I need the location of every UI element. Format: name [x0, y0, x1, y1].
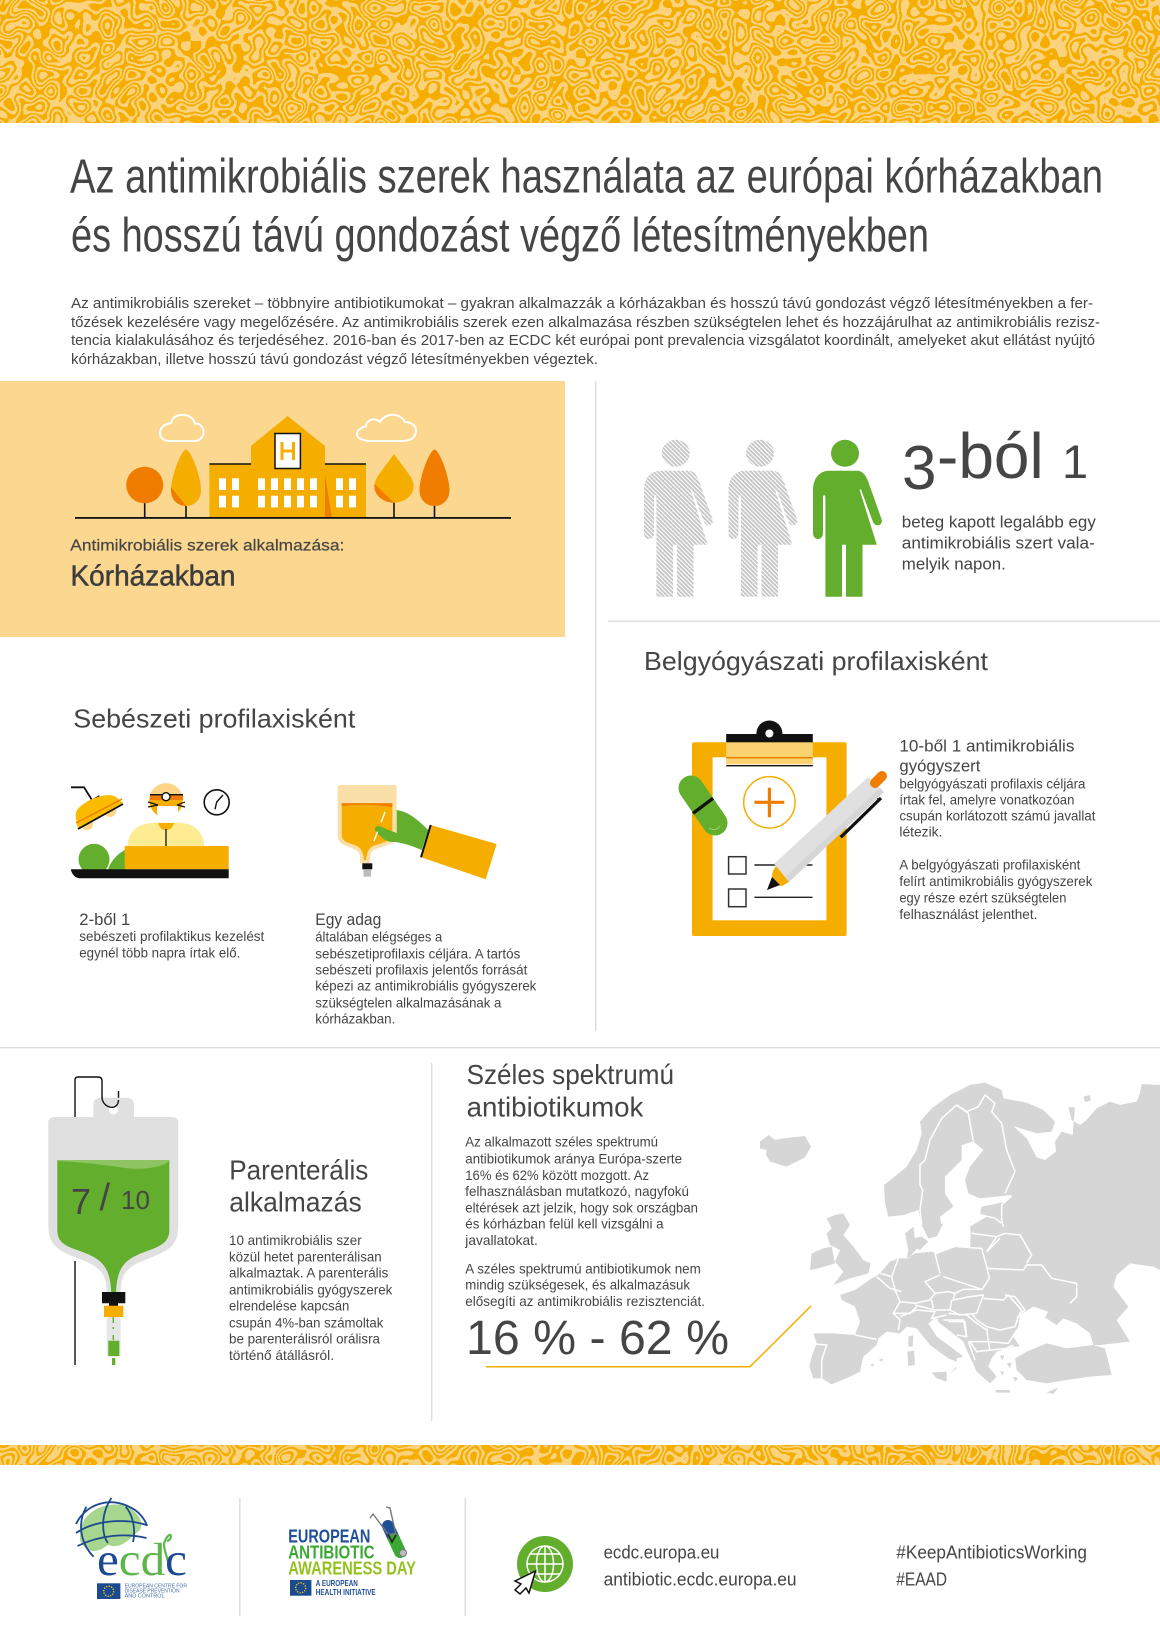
heading: Sebészeti profilaxisként	[73, 704, 356, 734]
text: one in ten: írtak fel, amelyre vonatkozóan	[899, 792, 1074, 807]
text: patient statistic: beteg kapott legalább egy	[902, 513, 1096, 532]
logo: European Antibiotic Awareness Day: AWARENESS DAY	[288, 1557, 417, 1578]
map of Europe	[760, 1083, 1160, 1394]
logo: ECDC: EUROPEAN CENTRE FOR	[125, 1584, 187, 1590]
text: hashtags: #KeepAntibioticsWorking	[896, 1542, 1087, 1562]
text: broad-spectrum details: antibiotikumok aránya Európa-szerte	[465, 1151, 682, 1166]
text: patient statistic	[902, 513, 1096, 574]
icon: hospital building	[209, 416, 366, 518]
heading: Széles spektrumú	[467, 1059, 674, 1090]
text: website links: ecdc.europa.eu	[604, 1542, 719, 1562]
panel: one in three patients	[644, 420, 1096, 597]
statistic: 7 / 10: 10	[121, 1185, 150, 1215]
text: parenteral details: antimikrobiális gyógyszerek	[229, 1282, 392, 1297]
logo: ECDC	[76, 1498, 187, 1600]
icon: trees	[126, 449, 449, 518]
text: one dose: sebészeti profilaxis jelentős forrását	[315, 962, 528, 977]
text: one dose: szükségtelen alkalmazásának a	[315, 995, 502, 1010]
text: broad-spectrum details: javallatokat.	[464, 1233, 538, 1248]
text: website links: antibiotic.ecdc.europa.eu	[604, 1570, 797, 1590]
icon: IV bag held by gloved hand	[338, 785, 497, 879]
footer	[76, 1498, 1087, 1616]
text: parenteral details: történő átállásról.	[229, 1348, 334, 1363]
text: broad-spectrum details: eltérések azt jelzik, hogy sok országban	[465, 1201, 698, 1216]
text: broad-spectrum details: 16% és 62% között mozgott. Az	[465, 1168, 649, 1183]
heading: Belgyógyászati profilaxisként	[644, 646, 989, 676]
logo: European Antibiotic Awareness Day: A EUROPEAN	[316, 1578, 358, 1588]
intro text: Az antimikrobiális szereket – többnyire antibiotikumokat – gyakran alkalmazzák a kórházakban és hosszú távú gondozást végző létesítményekben a fer-	[71, 296, 1093, 312]
text: patient statistic: melyik napon.	[902, 555, 1006, 574]
top pattern banner	[0, 0, 1160, 123]
text: hashtags: #EAAD	[896, 1570, 947, 1590]
text: broad-spectrum details: és kórházban felül kell vizsgálni a	[465, 1217, 664, 1232]
text: one in ten	[899, 737, 1096, 922]
text: website links	[604, 1542, 797, 1590]
panel: broad-spectrum antibiotics	[464, 1059, 1160, 1394]
title	[70, 151, 1103, 263]
text: two-in-one statistic	[79, 910, 265, 961]
text: one in ten: felírt antimikrobiális gyógyszerek	[899, 874, 1093, 889]
statistic: 3-ból 1: 3	[902, 434, 936, 503]
logo: European Antibiotic Awareness Day	[288, 1507, 417, 1597]
intro text: kórházakban, illetve hosszú távú gondozást végző létesítményekben végeztek.	[71, 352, 598, 368]
statistic: 3-ból 1: 1	[1062, 435, 1088, 488]
text: patient statistic: antimikrobiális szert vala-	[902, 533, 1095, 552]
text: two-in-one statistic: 2-ből 1	[79, 910, 130, 929]
icon: clipboard with pill and pen	[691, 720, 884, 936]
text: broad-spectrum details	[464, 1135, 705, 1309]
heading	[467, 1059, 674, 1123]
heading: alkalmazás	[229, 1187, 362, 1218]
text: two-in-one statistic: sebészeti profilaktikus kezelést	[79, 929, 265, 944]
icon: web globe with cursor	[515, 1536, 573, 1594]
text: parenteral details: be parenterálisról orálisra	[229, 1331, 380, 1346]
text: one in ten: A belgyógyászati profilaxisként	[899, 857, 1081, 872]
text: parenteral details	[229, 1233, 392, 1363]
intro text: tőzések kezelésére vagy megelőzésére. Az antimikrobiális szerek ezen alkalmazása részben szükségtelen lehet és hozzájárulhat az antimikrobiális rezisz-	[71, 315, 1100, 331]
icon: clouds	[160, 415, 416, 441]
statistic: 3-ból 1: -ból	[937, 420, 1062, 492]
text: one in ten: létezik.	[899, 825, 942, 840]
text: broad-spectrum details: felhasználásban mutatkozó, nagyfokú	[465, 1184, 689, 1199]
text: one dose: Egy adag	[315, 910, 381, 929]
logo: ECDC: AND CONTROL	[125, 1594, 165, 1600]
text: one in ten: gyógyszert	[899, 757, 981, 776]
logo: European Antibiotic Awareness Day: ANTIBIOTIC	[288, 1542, 375, 1563]
text: broad-spectrum details: elősegíti az antimikrobiális rezisztenciát.	[465, 1294, 705, 1309]
bottom pattern strip	[0, 1445, 1160, 1465]
statistic: 7 / 10: 7	[71, 1181, 91, 1222]
icon: infusion bag	[48, 1077, 178, 1365]
text: parenteral details: csupán 4%-ban számoltak	[229, 1315, 383, 1330]
panel: parenteral use	[48, 1077, 392, 1365]
intro text	[71, 296, 1100, 368]
title: és hosszú távú gondozást végző létesítményekben	[71, 210, 929, 263]
text: parenteral details: közül hetet parenterálisan	[229, 1250, 382, 1265]
callout line to map	[486, 1306, 811, 1367]
text: broad-spectrum details: A széles spektrumú antibiotikumok nem	[465, 1261, 701, 1276]
text: parenteral details: elrendelése kapcsán	[229, 1299, 349, 1314]
panel heading: Kórházakban	[70, 561, 236, 593]
icon: hospital scene	[75, 415, 511, 519]
text: broad-spectrum details: mindig szükségesek, és alkalmazásuk	[465, 1277, 690, 1292]
text: one in ten: egy része ezért szükségtelen	[899, 890, 1066, 905]
text: parenteral details: alkalmaztak. A parenterális	[229, 1266, 388, 1281]
logo: ECDC: ecdc	[97, 1534, 187, 1586]
icon: three person figures	[644, 440, 882, 597]
text: one dose	[315, 910, 536, 1026]
statistic: 16 % - 62 %: 16 % - 62 %	[466, 1312, 729, 1365]
panel: hospitals header	[0, 381, 565, 637]
text: one in ten: 10-ből 1 antimikrobiális	[899, 737, 1074, 756]
text: two-in-one statistic: egynél több napra írtak elő.	[79, 946, 240, 961]
text: one dose: általában elégséges a	[315, 930, 443, 945]
text: broad-spectrum details: Az alkalmazott széles spektrumú	[465, 1135, 658, 1150]
text: hashtags	[896, 1542, 1087, 1590]
statistic: 7 / 10: /	[89, 1177, 121, 1219]
text: one dose: sebészetiprofilaxis céljára. A tartós	[315, 946, 520, 961]
panel: medical prophylaxis	[644, 646, 1096, 936]
text: parenteral details: 10 antimikrobiális szer	[229, 1233, 362, 1248]
heading	[229, 1154, 368, 1218]
text: one dose: kórházakban.	[315, 1011, 395, 1026]
logo: European Antibiotic Awareness Day: HEALTH INITIATIVE	[316, 1587, 376, 1597]
text: one in ten: felhasználást jelenthet.	[899, 907, 1037, 922]
text: one in ten: csupán korlátozott számú javallat	[899, 809, 1096, 824]
heading: Parenterális	[229, 1154, 368, 1185]
icon: surgeon at operating table	[71, 783, 229, 878]
logo: European Antibiotic Awareness Day: EUROPEAN	[288, 1526, 370, 1547]
heading: antibiotikumok	[467, 1092, 644, 1123]
intro text: tencia kialakulásához és terjedéséhez. 2016-ban és 2017-ben az ECDC két európai pont prevalencia vizsgálatot koordinált, amelyeket akut ellátást nyújtó	[71, 333, 1095, 349]
logo: ECDC: DISEASE PREVENTION	[125, 1588, 180, 1594]
panel: surgical prophylaxis	[71, 704, 536, 1026]
text: one dose: képezi az antimikrobiális gyógyszerek	[315, 979, 536, 994]
text: one in ten: belgyógyászati profilaxis céljára	[899, 776, 1086, 791]
panel subtitle: Antimikrobiális szerek alkalmazása:	[70, 538, 344, 555]
